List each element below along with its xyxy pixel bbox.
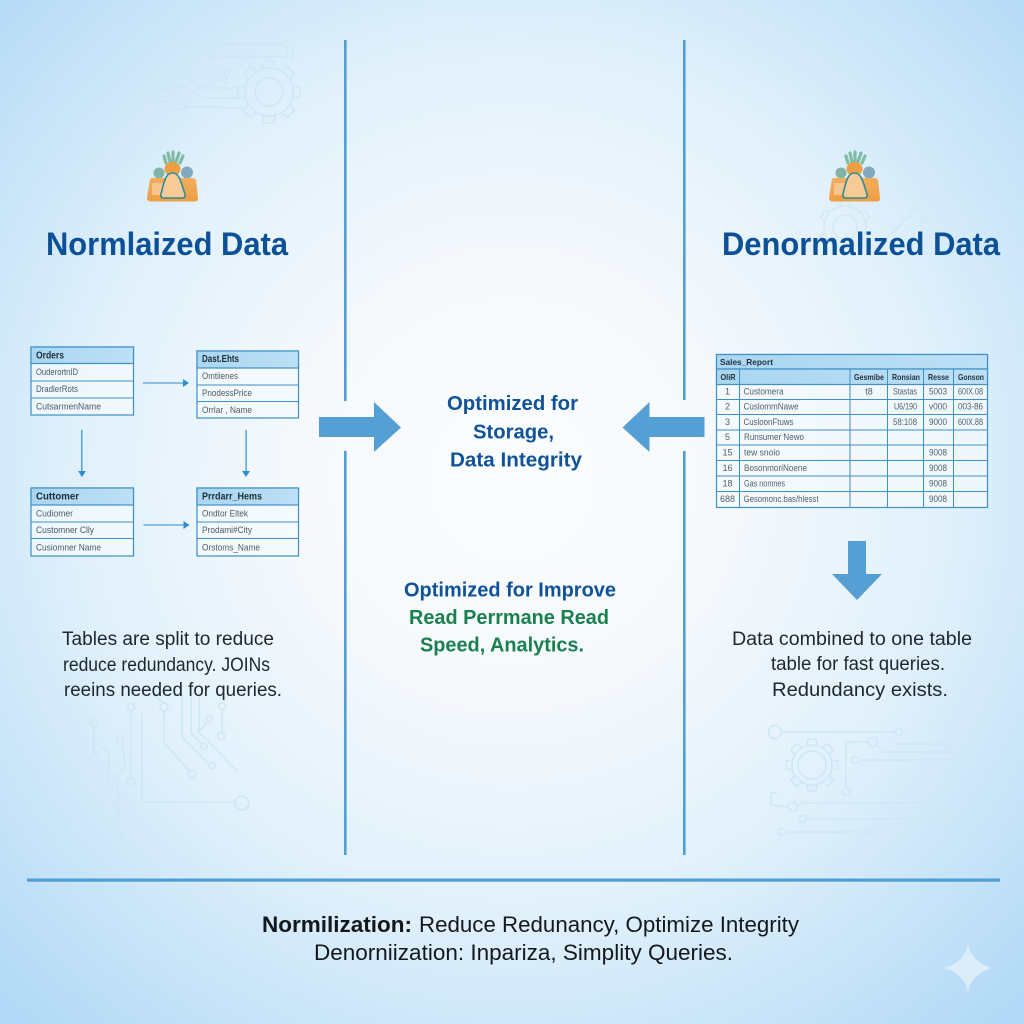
text: read optimisation: Read Perrmane Read — [409, 607, 609, 629]
icon: basket with carrot, right — [829, 152, 880, 202]
arrow: down from sales report — [832, 541, 882, 600]
table: product items: Prrdarr_Hems — [202, 492, 262, 502]
table: sales report: Gesomonc.bas/hlesst — [744, 494, 819, 504]
text: storage optimisation — [447, 393, 583, 472]
table: product items: Ondtor Eltek — [202, 508, 248, 520]
text: denormalized description — [732, 629, 972, 701]
table: sales report: Customera — [744, 386, 784, 396]
table: sales report: 9008 — [929, 448, 947, 458]
table: orders: DradlerRots — [36, 384, 78, 395]
text: denormalized description: Data combined to one table — [732, 629, 972, 650]
left vertical divider — [344, 40, 347, 855]
table: sales report: 003-86 — [958, 402, 983, 412]
table: sales report: 2 — [725, 402, 730, 412]
table: orders: CutsarmenName — [36, 402, 101, 412]
table: dast ehts: Dast.Ehts — [202, 354, 239, 365]
table: sales report: 18 — [722, 478, 733, 488]
heading: normalized data: Normlaized Data — [46, 226, 288, 262]
table: sales report: 60IX.88 — [958, 417, 983, 427]
panel: centre comparison — [404, 393, 616, 656]
table: sales report: t8 — [865, 386, 873, 396]
text: read optimisation — [404, 580, 616, 656]
decoration: bottom-left circuit — [90, 693, 249, 841]
table: dast ehts — [197, 351, 298, 418]
table: sales report: 58:108 — [893, 417, 917, 427]
text: read optimisation: Optimized for Improve — [404, 580, 616, 602]
table: sales report: 9000 — [929, 417, 947, 427]
table: customer: Cudiomer — [36, 508, 73, 520]
table: customer — [31, 488, 134, 556]
arrows: table relations — [78, 379, 250, 529]
table: sales report: Resse — [928, 372, 949, 382]
table: sales report: 5 — [725, 432, 730, 442]
table: sales report: 16 — [722, 463, 733, 473]
decoration: top-left circuit and gear — [149, 41, 300, 123]
table: sales report: v000 — [929, 402, 947, 412]
table: orders — [31, 347, 134, 415]
table: dast ehts: PnodessPrice — [202, 388, 252, 399]
table: sales report: Gas nomnes — [744, 478, 785, 488]
table: sales report: 9008 — [929, 463, 947, 473]
table: sales report: tew snoio — [744, 448, 780, 458]
table: customer: Customner Clly — [36, 525, 94, 536]
table: sales report: Gonson — [958, 372, 984, 382]
table: sales report: Ronsian — [892, 372, 920, 382]
text: storage optimisation: Data Integrity — [450, 450, 583, 472]
text: read optimisation: Speed, Analytics. — [420, 634, 584, 656]
text: normalized description: reeins needed for queries. — [64, 680, 282, 701]
footer summary — [262, 912, 799, 965]
table: sales report: Sales_Report — [720, 357, 773, 367]
text: normalized description: reduce redundancy. JOINs — [63, 655, 270, 676]
table: orders: OuderortnID — [36, 367, 78, 378]
table: sales report: OliR — [720, 372, 736, 382]
table: sales report: U6/190 — [894, 402, 917, 412]
table: dast ehts: Orrlar , Name — [202, 405, 252, 416]
table: sales report: 3 — [725, 417, 730, 427]
table: sales report: CusloonFtuws — [744, 417, 794, 427]
text: storage optimisation: Optimized for — [447, 393, 578, 415]
table: sales report: 15 — [722, 448, 733, 458]
table: sales report: 5003 — [929, 386, 947, 396]
table: product items — [197, 488, 298, 556]
table: sales report: Gesmibe — [854, 372, 884, 382]
text: denormalized description: table for fast queries. — [771, 654, 945, 675]
table: product items: Prodami#City — [202, 525, 252, 536]
table: sales report: CuslommNawe — [744, 402, 798, 412]
text: normalized description: Tables are split to reduce — [62, 629, 274, 650]
table: sales report: Runsumer Newo — [744, 432, 804, 442]
footer rule — [27, 878, 1000, 882]
text: denormalized description: Redundancy exists. — [772, 680, 948, 701]
panel: normalized data — [31, 152, 298, 701]
decoration: bottom-right circuit and gear — [768, 726, 970, 836]
table: sales report: 60IX.08 — [958, 386, 983, 396]
arrow: left pointing to centre — [622, 402, 704, 452]
table: customer: Cusiomner Name — [36, 542, 101, 554]
text: storage optimisation: Storage, — [473, 422, 554, 444]
table: sales report: 1 — [725, 386, 730, 396]
footer summary: Reduce Redunancy, Optimize Integrity — [419, 912, 799, 937]
table: sales report: 9008 — [929, 494, 947, 504]
icon: sparkle — [944, 944, 992, 992]
icon: basket with carrot, left — [147, 152, 198, 202]
table: product items: Orstoms_Name — [202, 542, 260, 554]
table: sales report: BosonmoriNoene — [744, 463, 807, 473]
footer summary: Denorniization: Inpariza, Simplity Queries. — [314, 940, 733, 965]
panel: denormalized data — [716, 152, 1000, 701]
table: sales report: 688 — [720, 494, 735, 504]
table: orders: Orders — [36, 350, 64, 362]
text: normalized description — [62, 629, 282, 701]
table: sales report: 9008 — [929, 478, 947, 488]
decoration: faint gear behind right heading — [820, 201, 926, 248]
table: sales report: Stastas — [893, 386, 917, 396]
table: customer: Cuttomer — [36, 492, 79, 502]
arrow: right pointing to centre — [319, 402, 401, 452]
footer summary: Normilization: — [262, 912, 412, 937]
right vertical divider — [683, 40, 686, 855]
table: sales report — [716, 354, 988, 508]
heading: denormalized data: Denormalized Data — [722, 226, 1000, 262]
table: dast ehts: Omtiienes — [202, 371, 238, 382]
